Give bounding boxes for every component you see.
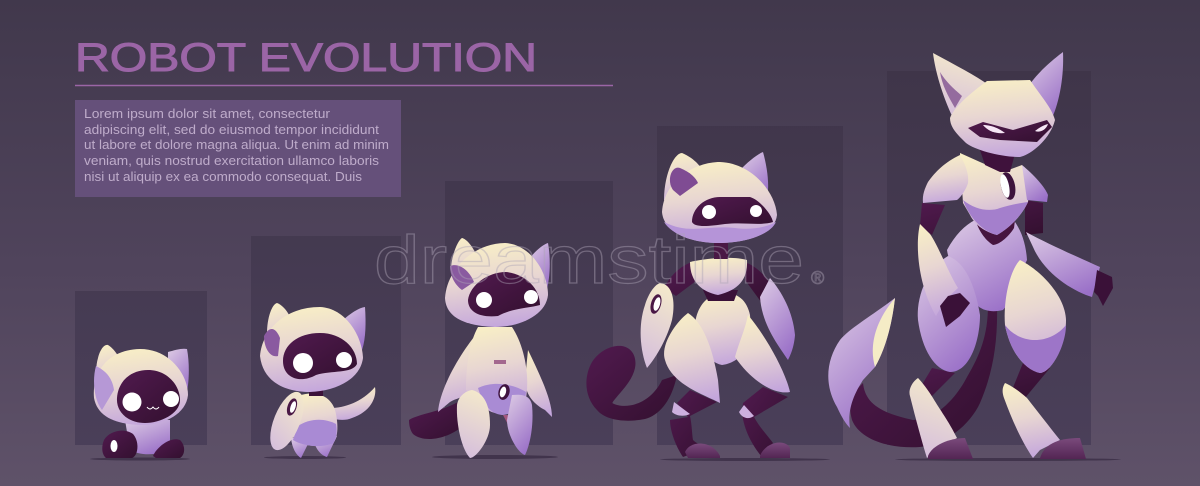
robot 4: adolescent <box>586 152 795 458</box>
text panel: nisi ut aliquip ex ea commodo consequat. Duis <box>84 169 363 184</box>
robot 1: baby on wheels <box>94 345 189 458</box>
robot 2: small with tail <box>260 303 375 458</box>
text panel <box>75 100 401 197</box>
watermark: ® <box>811 268 824 288</box>
robot 3: standing child <box>409 238 552 458</box>
title: ROBOT EVOLUTION <box>75 36 537 80</box>
watermark: dreamstime <box>374 222 804 298</box>
text panel: adipiscing elit, sed do eiusmod tempor incididunt <box>84 122 379 137</box>
text panel: Lorem ipsum dolor sit amet, consectetur <box>84 106 331 121</box>
height bars behind robots <box>75 71 1091 445</box>
ground shadows <box>90 455 1121 461</box>
robot 5: adult <box>828 52 1113 459</box>
text panel: veniam, quis nostrud exercitation ullamco laboris <box>84 153 380 168</box>
text panel: ut labore et dolore magna aliqua. Ut enim ad minim <box>84 137 389 152</box>
